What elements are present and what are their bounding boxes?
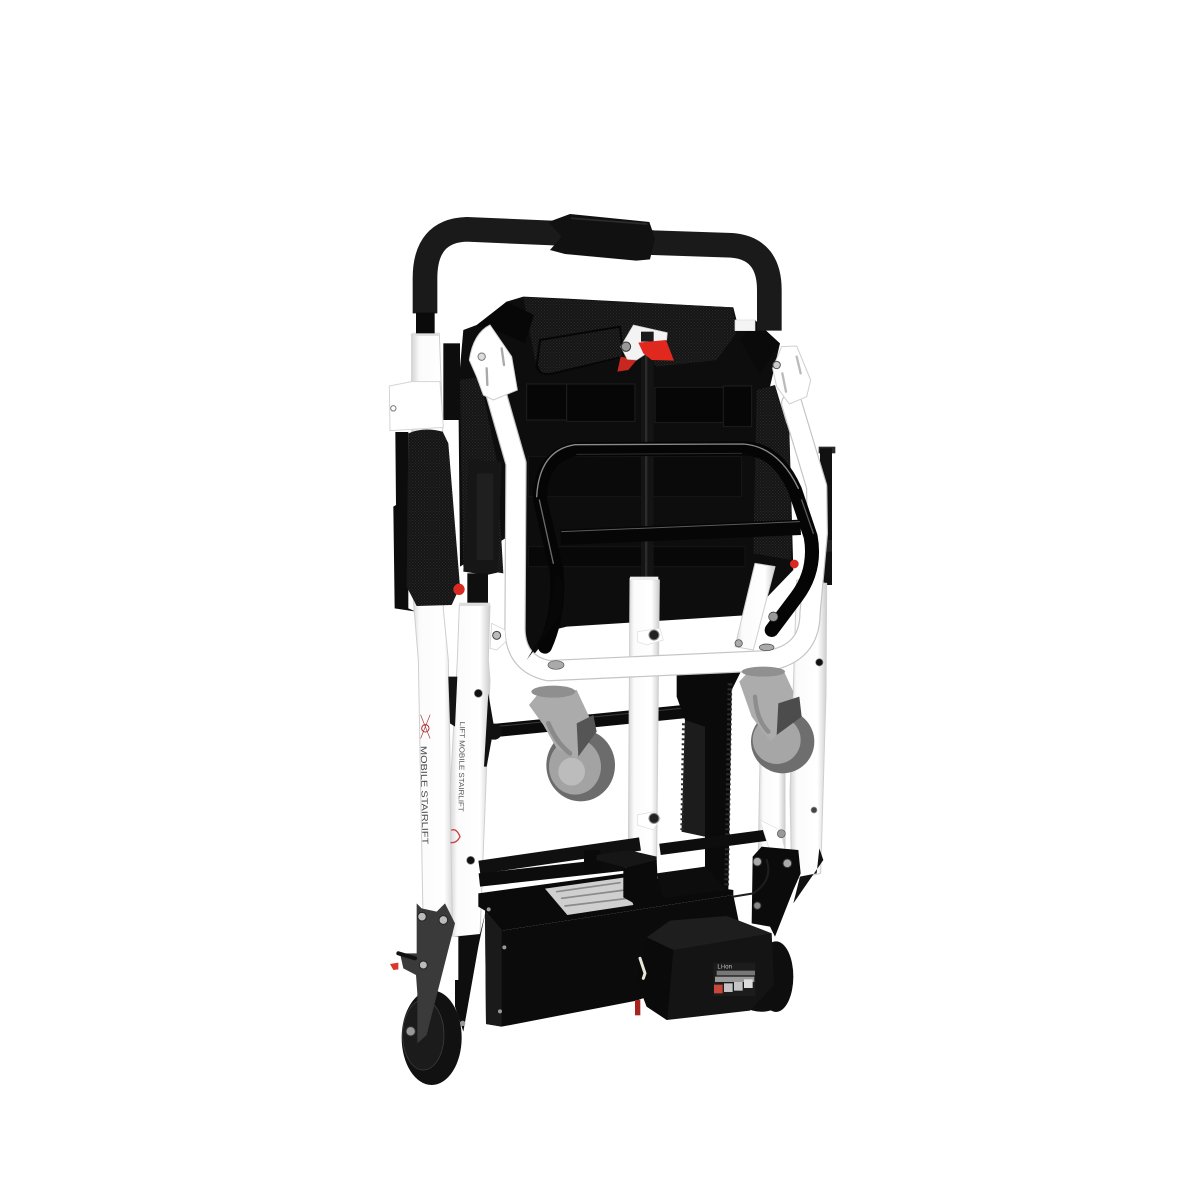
rear caster axle	[486, 706, 710, 740]
lower assembly	[390, 667, 823, 1085]
right wheel	[743, 941, 793, 1012]
brand marking on post	[419, 715, 467, 845]
control box front	[485, 895, 747, 1027]
left side rail	[393, 343, 460, 612]
handle grip	[548, 214, 655, 261]
battery pack	[637, 916, 774, 1020]
right side plate	[733, 847, 823, 937]
right frame strut behind footrest	[735, 563, 775, 650]
left caster wheel	[529, 686, 615, 801]
seat straps	[527, 384, 752, 567]
seat cushion and backrest	[458, 297, 793, 662]
right rear struts	[758, 580, 827, 880]
right hinge	[773, 346, 811, 404]
black footrest frame	[527, 444, 813, 660]
left outer white post	[412, 333, 455, 935]
left side plate	[390, 903, 455, 1043]
left seat pad	[407, 430, 460, 606]
footrest crossbar	[561, 522, 801, 537]
white folding frame	[495, 390, 817, 671]
top handle	[416, 229, 769, 333]
toothed drive belt	[677, 670, 742, 890]
left front wheel	[402, 990, 465, 1085]
brand marking on post: MOBILE STAIRLIFT	[419, 746, 430, 845]
centre white post	[628, 577, 663, 857]
left black post foot	[452, 910, 486, 1032]
red seat latch	[617, 325, 674, 372]
left grip pad	[459, 459, 502, 606]
control box top	[478, 867, 733, 931]
left inner white post	[448, 605, 494, 937]
left post bracket	[389, 382, 443, 431]
right side pad	[819, 447, 835, 585]
left hinge	[469, 325, 517, 400]
warning label	[545, 877, 633, 915]
red pull pin	[635, 1000, 640, 1015]
horizontal support bars	[479, 820, 785, 880]
frame bolts	[490, 612, 778, 669]
battery label	[713, 963, 755, 996]
right caster wheel	[739, 667, 814, 773]
centre pole	[641, 332, 654, 582]
battery label: Li-ion	[717, 964, 732, 970]
red release knobs	[453, 560, 799, 595]
brand marking on post: LIFT MOBILE STAIRLIFT	[456, 722, 467, 812]
post socket bracket	[597, 850, 658, 903]
